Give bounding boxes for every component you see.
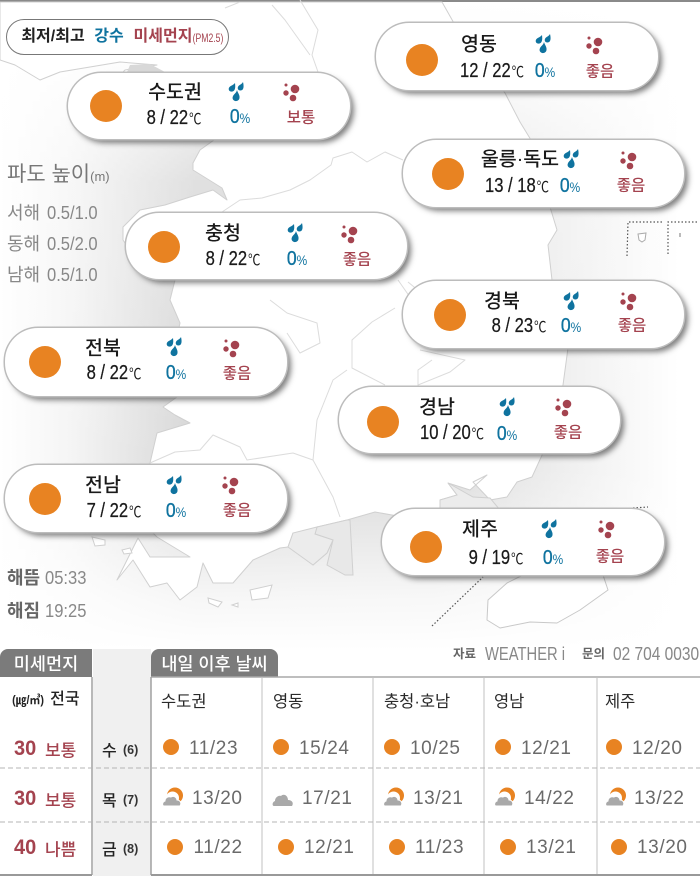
row 2 forecast (163, 788, 685, 809)
row 2 forecast: 13/22 (634, 788, 685, 809)
row 1 forecast: 12/20 (632, 738, 683, 759)
table grid (0, 676, 700, 876)
card: 전남: 0% (166, 500, 186, 522)
tab: fine dust (0, 649, 92, 677)
dust value row 3 (14, 836, 76, 860)
background map (0, 0, 700, 628)
contact label: 문의 (582, 647, 605, 661)
sunset: 19:25 (45, 601, 87, 621)
card: 수도권: 0% (230, 106, 250, 128)
south sea: 0.5/1.0 (47, 265, 98, 285)
card: 제주 (382, 509, 664, 575)
card: 충청: 0% (287, 248, 307, 270)
dust value row 3: 나쁨 (45, 840, 76, 860)
day: Wed: 수 (102, 743, 117, 760)
panel: sunrise and sunset (7, 568, 87, 621)
card: 울릉·독도: 13 / 18℃ (485, 175, 549, 197)
sunrise: 해뜸 (7, 568, 40, 588)
card: 충청: 충청 (205, 222, 241, 244)
source: 자료 (453, 647, 476, 661)
east sea: 0.5/2.0 (47, 234, 98, 254)
dust value row 2: 보통 (45, 792, 76, 810)
card: 제주: 0% (543, 547, 563, 569)
card: 전북: 좋음 (223, 365, 251, 382)
day: Fri: (8) (123, 842, 138, 856)
source name: WEATHER i (485, 644, 565, 664)
dust value row 2: 30 (14, 787, 36, 810)
region: 영남: 영남 (494, 693, 524, 711)
sunset (7, 601, 87, 621)
province borders (150, 0, 465, 517)
panel: wave height (7, 163, 110, 285)
dotted maritime lines (432, 222, 698, 626)
dust value row 3: 40 (14, 836, 36, 859)
row 3 forecast: 13/21 (526, 837, 577, 858)
contact number: 02 704 0030 (613, 644, 699, 664)
card: 전남: 전남 (85, 474, 121, 496)
card: 울릉·독도: 좋음 (617, 177, 645, 194)
day: Fri (102, 842, 138, 859)
card: 경남 (339, 387, 620, 453)
card: 전북: 전북 (85, 337, 121, 359)
unit label: (㎍/㎥) (12, 693, 44, 707)
jeju (487, 575, 608, 628)
region: 충청·호남: 충청·호남 (384, 693, 450, 711)
dust value row 2 (14, 787, 76, 810)
west sea: 서해 (7, 203, 40, 223)
legend: temperature: 최저/최고 (21, 28, 85, 45)
card: 경남: 10 / 20℃ (420, 422, 484, 444)
day: Thu: 목 (102, 793, 117, 810)
card: 제주: 9 / 19℃ (469, 547, 523, 569)
tab: fine dust: 미세먼지 (14, 654, 78, 674)
region: 제주: 제주 (605, 693, 635, 711)
sunset: 해짐 (7, 601, 40, 621)
card: 충청: 좋음 (343, 251, 371, 268)
unit label (12, 690, 80, 708)
row 3 forecast: 11/23 (415, 837, 464, 858)
card: 경북: 경북 (484, 290, 520, 312)
heading: wave height: 파도 높이(m) (7, 163, 110, 186)
row 2 forecast: 13/21 (413, 788, 464, 809)
card: 충청: 8 / 22℃ (206, 248, 260, 270)
east sea: 동해 (7, 234, 40, 254)
day: Thu: (7) (123, 793, 138, 807)
row 1 forecast: 10/25 (410, 738, 461, 759)
card: 울릉·독도 (403, 140, 684, 207)
south sea (7, 265, 98, 285)
card: 제주: 좋음 (596, 548, 624, 565)
row 2 forecast: 14/22 (524, 788, 575, 809)
row 2 forecast: 17/21 (302, 788, 353, 809)
legend pill (6, 19, 229, 55)
card: 수도권: 8 / 22℃ (147, 107, 201, 129)
sunrise: 05:33 (45, 568, 87, 588)
card: 영동 (376, 23, 658, 90)
row 1 forecast (163, 738, 683, 759)
card: 전북 (5, 328, 287, 396)
card: 제주: 제주 (462, 518, 498, 540)
card: 수도권 (68, 73, 350, 139)
card: 수도권: 보통 (287, 109, 315, 126)
card: 전남: 7 / 22℃ (87, 500, 141, 522)
card: 영동: 좋음 (586, 63, 614, 80)
card: 경북: 좋음 (618, 317, 646, 334)
card: 경북 (403, 281, 684, 348)
card: 영동: 영동 (461, 33, 497, 55)
tab: forecast: 내일 이후 날씨 (161, 654, 268, 674)
card: 경북: 8 / 23℃ (492, 315, 546, 337)
row 3 forecast: 13/20 (637, 837, 688, 858)
panel: forecast table (0, 649, 700, 876)
land (0, 2, 570, 600)
dust value row 1: 30 (14, 737, 36, 760)
dust value row 1 (14, 737, 76, 760)
day: Thu (102, 793, 138, 810)
row 3 forecast: 12/21 (304, 837, 355, 858)
legend: precipitation: 강수 (94, 28, 124, 45)
weekday column background (93, 649, 151, 876)
card: 영동: 0% (535, 60, 555, 82)
day: Wed: (6) (123, 743, 138, 757)
card: 울릉·독도: 울릉·독도 (481, 148, 559, 170)
unit label: 전국 (50, 691, 80, 708)
tab: forecast (151, 649, 278, 677)
card: 경남: 경남 (419, 396, 455, 418)
card: 울릉·독도: 0% (560, 175, 580, 197)
region: 수도권: 수도권 (161, 693, 207, 711)
card: 경남: 0% (497, 423, 517, 445)
legend: PM2.5: (PM2.5) (193, 31, 223, 45)
row 2 forecast: 13/20 (192, 788, 243, 809)
region: 영동: 영동 (273, 693, 303, 711)
card: 전남: 좋음 (223, 502, 251, 519)
south sea: 남해 (7, 265, 40, 285)
row 1 forecast: 11/23 (189, 738, 238, 759)
day: Fri: 금 (102, 842, 117, 859)
source credit (453, 644, 699, 664)
sunrise (7, 568, 87, 588)
legend: fine dust: 미세먼지 (134, 28, 192, 45)
card: 전남 (5, 465, 287, 532)
card: 영동: 12 / 22℃ (460, 60, 524, 82)
row 3 forecast (167, 837, 688, 858)
row 3 forecast: 11/22 (194, 837, 243, 858)
grey southern islands (315, 520, 353, 575)
dust value row 1: 보통 (45, 742, 76, 760)
card: 충청 (126, 213, 407, 279)
east sea (7, 234, 98, 254)
row 1 forecast: 15/24 (299, 738, 350, 759)
west sea: 0.5/1.0 (47, 203, 98, 223)
card: 전북: 8 / 22℃ (87, 362, 141, 384)
card: 수도권: 수도권 (148, 81, 202, 103)
card: 경남: 좋음 (554, 424, 582, 441)
card: 경북: 0% (561, 315, 581, 337)
day: Wed (102, 743, 138, 760)
card: 전북: 0% (166, 362, 186, 384)
row 1 forecast: 12/21 (521, 738, 572, 759)
west sea (7, 203, 98, 223)
